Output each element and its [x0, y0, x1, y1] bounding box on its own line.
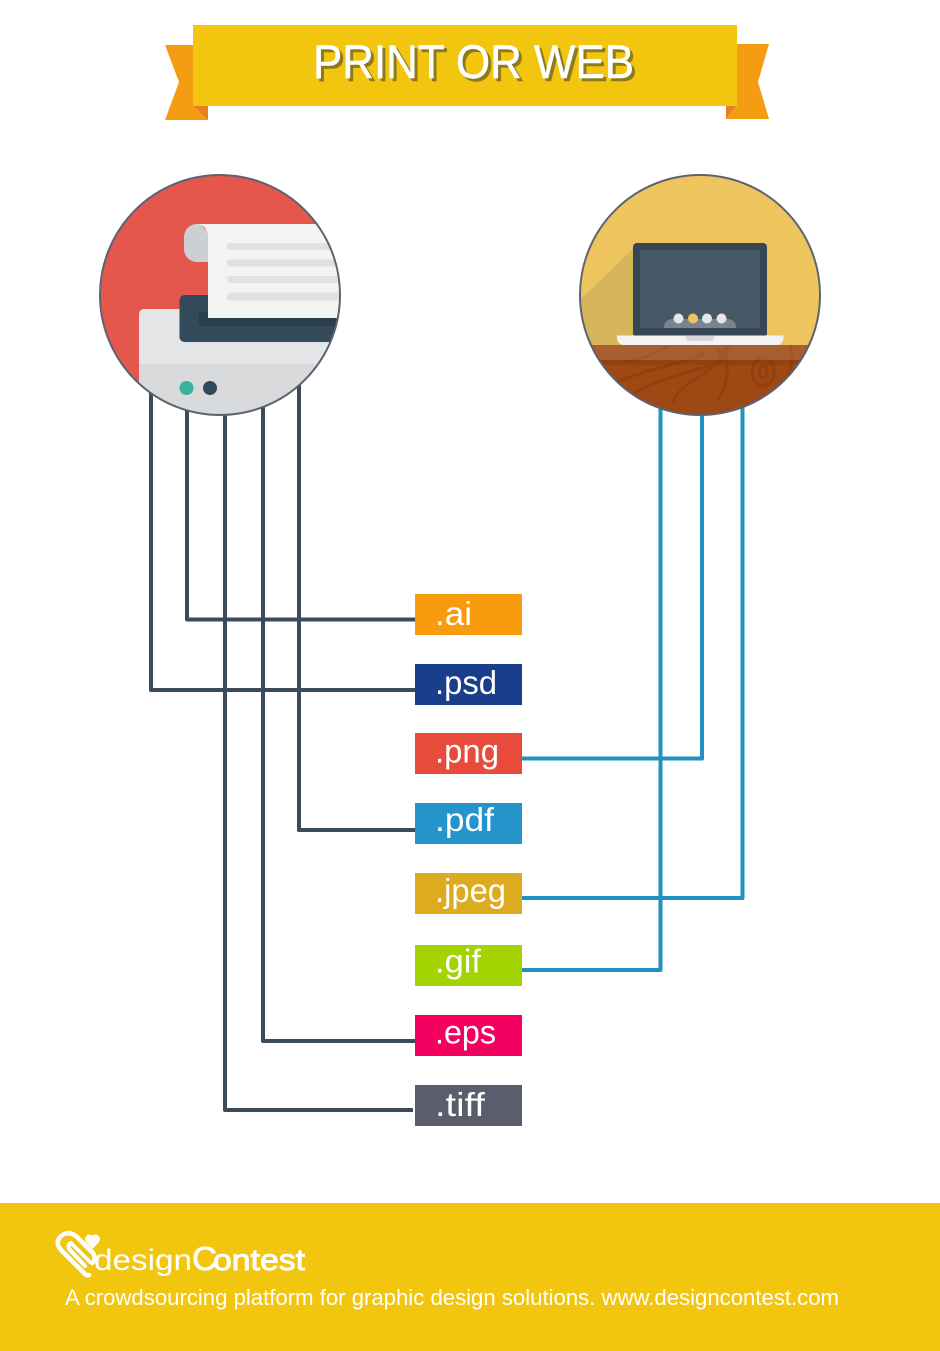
- label: .jpeg: [415, 872, 522, 914]
- label: .gif: .gif: [435, 942, 482, 980]
- label: .psd: [415, 664, 522, 705]
- icon: printer: [100, 175, 350, 419]
- tagline: A crowdsourcing platform for graphic design solutions. www.designcontest.com: [65, 1285, 839, 1310]
- label: .eps: [415, 1014, 522, 1056]
- footer: [0, 1203, 940, 1351]
- label: .gif: [415, 942, 522, 986]
- connector lines: print: [151, 380, 415, 1110]
- label: .ai: [415, 594, 522, 635]
- logo wordmark: ontest: [213, 1244, 306, 1277]
- label: .png: .png: [435, 732, 499, 770]
- icon: heart logo: [58, 1233, 100, 1275]
- label: .pdf: [415, 801, 522, 844]
- label: .jpeg: .jpeg: [435, 872, 506, 909]
- logo wordmark: design: [94, 1244, 192, 1277]
- title text: PRINT OR WEB: [313, 35, 634, 88]
- label: .eps: .eps: [435, 1014, 496, 1050]
- label: .tiff: [415, 1085, 522, 1126]
- label: .psd: .psd: [435, 664, 497, 701]
- title ribbon: [165, 25, 769, 120]
- label: .ai: .ai: [435, 595, 472, 632]
- title text: PRINT OR WEB: [316, 38, 637, 91]
- icon: laptop: [580, 175, 820, 415]
- logo wordmark: C: [192, 1240, 217, 1277]
- logo: [58, 1233, 306, 1277]
- connector lines: web: [522, 405, 742, 970]
- label: .pdf: .pdf: [435, 801, 495, 838]
- label: .png: [415, 732, 522, 774]
- label: .tiff: .tiff: [435, 1086, 486, 1123]
